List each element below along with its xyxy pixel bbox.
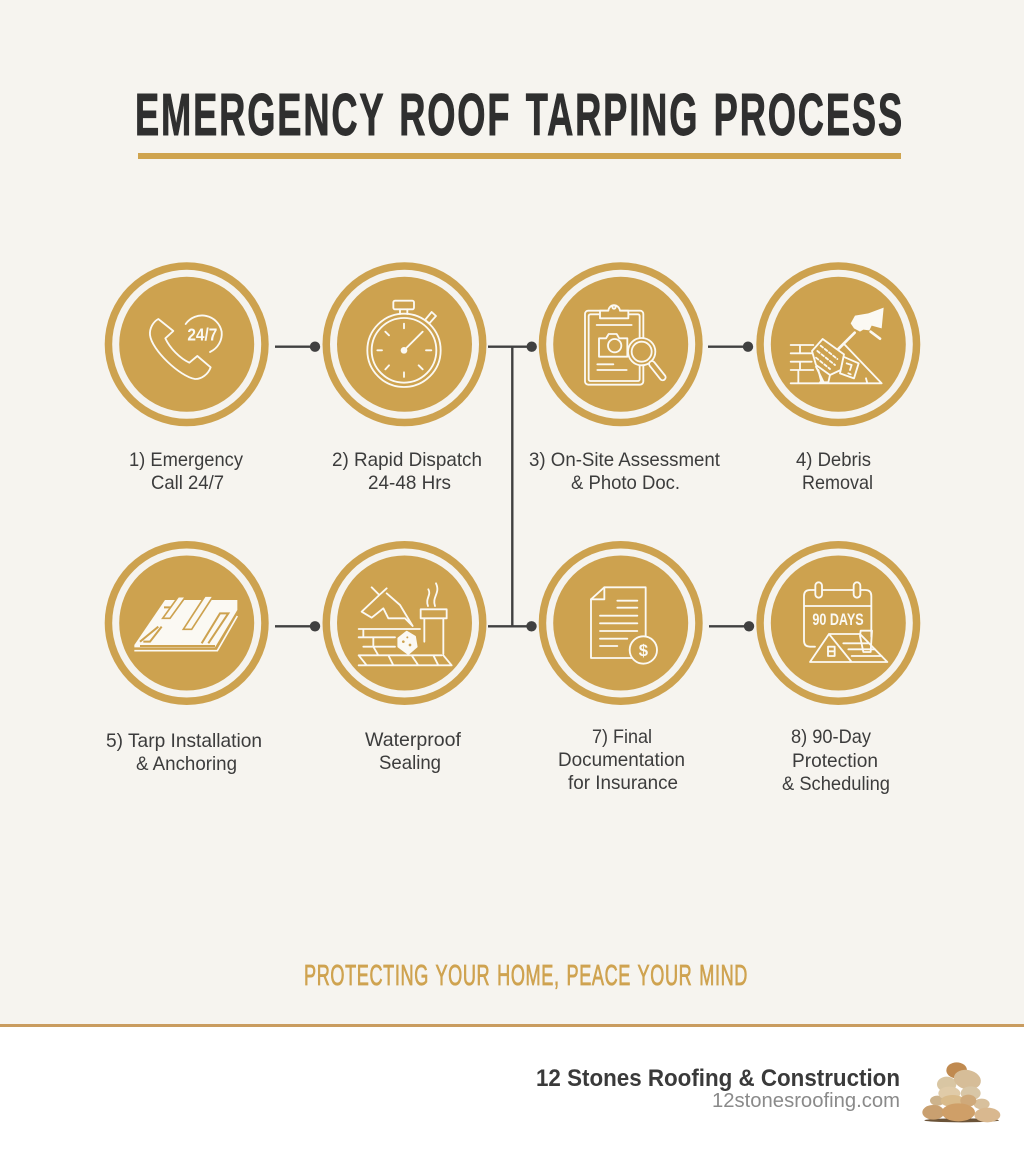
label 6 (365, 729, 462, 774)
icon: sealant gun, chimney, roof (359, 583, 452, 665)
label 4 (796, 449, 873, 494)
label 3 (529, 449, 721, 494)
step 2: rapid dispatch (322, 262, 486, 494)
icon: clipboard and magnifier (585, 305, 663, 385)
badge 8 (756, 541, 920, 705)
label 2: 24-48 Hrs (368, 472, 451, 494)
label 4: 4) Debris (796, 449, 871, 471)
label 8: 8) 90-Day (791, 726, 871, 748)
label 6: Sealing (379, 752, 441, 774)
step 1: emergency call (105, 262, 269, 494)
step 7: final documentation (539, 541, 703, 794)
label 1: Call 24/7 (151, 472, 224, 494)
icon: hand scraping roof debris (791, 308, 884, 383)
icon: document with dollar: $ (639, 641, 649, 660)
step 5: tarp installation (105, 541, 269, 775)
badge 5 (105, 541, 269, 705)
label 5 (106, 730, 262, 775)
step 8: 90-day protection (756, 541, 920, 795)
label 1 (129, 449, 243, 494)
footer band (0, 1024, 1024, 1154)
step 3: on-site assessment (529, 262, 721, 494)
badge 4 (756, 262, 920, 426)
label 8: & Scheduling (782, 773, 890, 795)
icon: anchored tarp (134, 596, 237, 651)
badge 6 (322, 541, 486, 705)
label 7 (558, 726, 685, 794)
label 7: Documentation (558, 749, 685, 771)
badge 1 (105, 262, 269, 426)
icon: stopwatch (367, 301, 441, 387)
label 8 (782, 726, 890, 795)
label 4: Removal (802, 472, 873, 494)
step 6: waterproof sealing (322, 541, 486, 774)
badge 3 (539, 262, 703, 426)
icon: stone pile logo (922, 1062, 1000, 1122)
label 7: 7) Final (592, 726, 652, 748)
label 6: Waterproof (365, 729, 462, 751)
icon: 90-day calendar and house: 90 DAYS (812, 610, 864, 629)
label 1: 1) Emergency (129, 449, 243, 471)
label 5: & Anchoring (136, 753, 237, 775)
label 3: 3) On-Site Assessment (529, 449, 721, 471)
badge 2 (322, 262, 486, 426)
company name: 12 Stones Roofing & Construction (536, 1065, 900, 1092)
step 4: debris removal (756, 262, 920, 494)
icon: 90-day calendar and house (804, 582, 887, 662)
label 7: for Insurance (568, 772, 678, 794)
badge 7 (539, 541, 703, 705)
icon: phone with 24/7 (150, 315, 222, 379)
tagline: PROTECTING YOUR HOME, PEACE YOUR MIND (304, 960, 748, 992)
icon: document with dollar (591, 587, 657, 664)
title underline (138, 153, 901, 159)
website: 12stonesroofing.com (712, 1089, 900, 1112)
label 8: Protection (792, 750, 878, 772)
label 2: 2) Rapid Dispatch (332, 449, 482, 471)
label 3: & Photo Doc. (571, 472, 680, 494)
icon: phone with 24/7: 24/7 (187, 325, 217, 345)
connector lines (275, 342, 754, 632)
label 5: 5) Tarp Installation (106, 730, 262, 752)
label 2 (332, 449, 482, 494)
